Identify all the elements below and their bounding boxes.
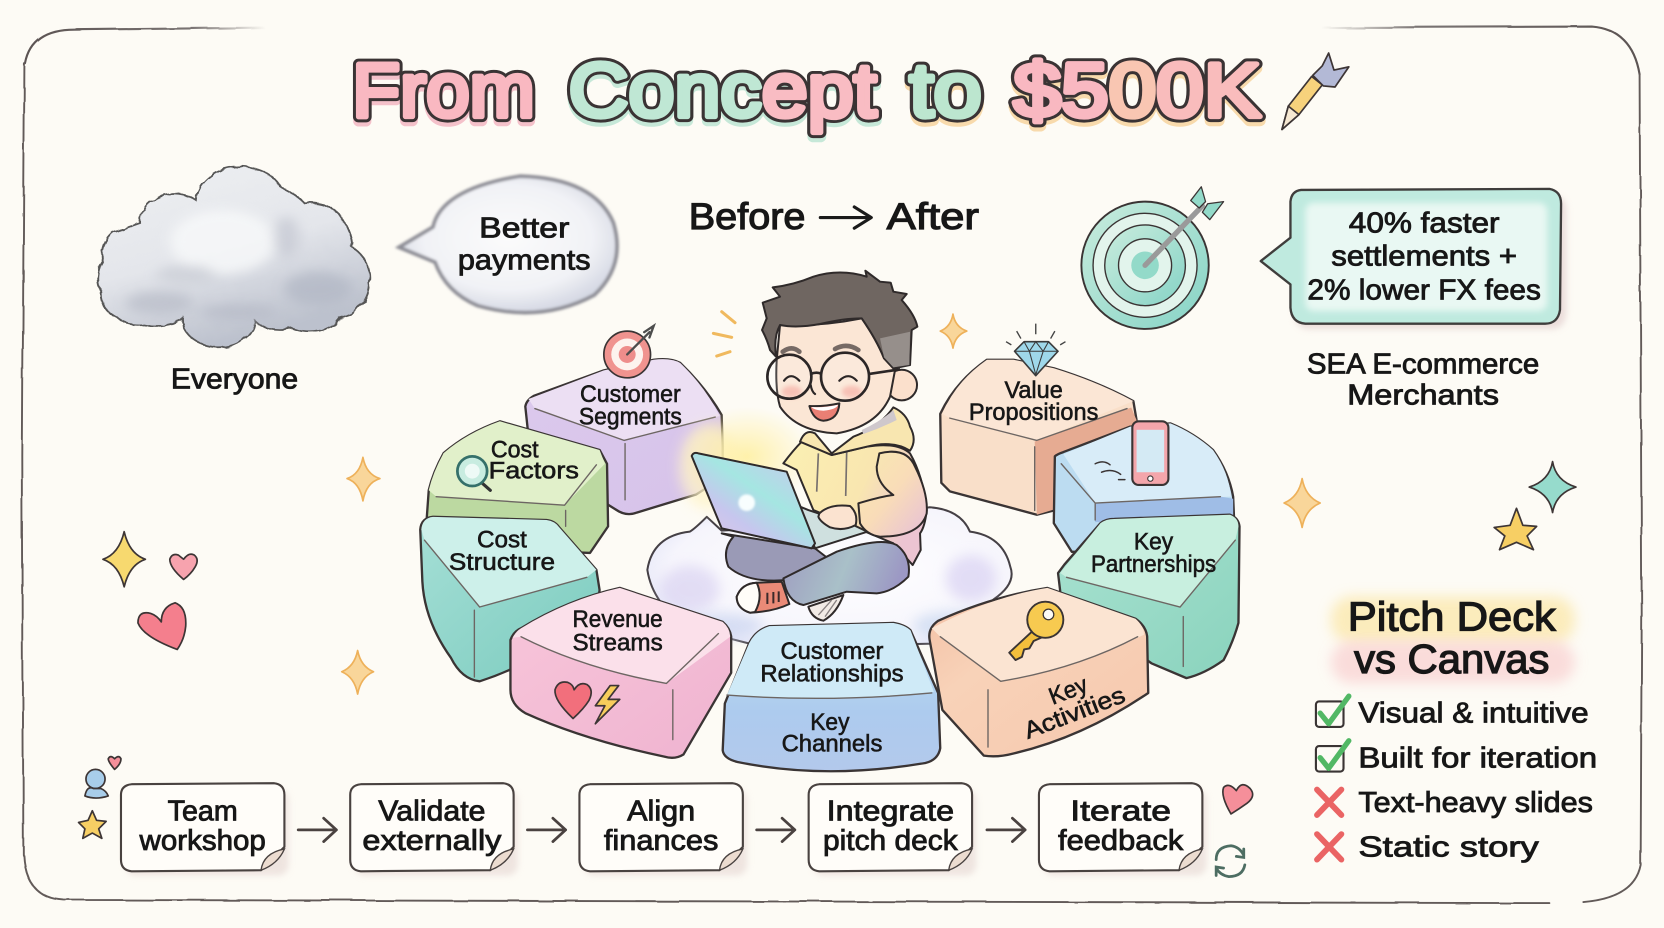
hair xyxy=(762,271,917,368)
process step: Align finances xyxy=(579,783,747,876)
icon: heart and lightning xyxy=(555,682,620,724)
title: Concept xyxy=(569,49,877,134)
character with laptop xyxy=(680,271,927,621)
process step: Align finances: finances xyxy=(604,825,718,857)
block: Key Partnerships: Partnerships xyxy=(1091,551,1216,578)
title: to xyxy=(909,53,982,138)
sleeve xyxy=(858,452,927,537)
heading: Pitch Deck vs Canvas: Pitch Deck xyxy=(1348,593,1557,639)
block: Customer Relationships / Key Channels: Customer xyxy=(781,638,884,665)
process step: Iterate feedback: feedback xyxy=(1058,825,1184,857)
title: $500K xyxy=(1013,53,1261,138)
process step: Iterate feedback: Iterate xyxy=(1070,795,1171,827)
front leg xyxy=(783,542,909,605)
title: $500K xyxy=(1013,49,1261,134)
block: Value Propositions: Propositions xyxy=(969,399,1098,426)
block: Customer Segments xyxy=(525,359,739,514)
label: Everyone: Everyone xyxy=(171,363,298,395)
heading: Before to After: Before xyxy=(689,195,805,237)
callout: 40% faster settlements xyxy=(1261,189,1566,329)
label: SEA E-commerce Merchants: SEA E-commerce xyxy=(1307,349,1539,381)
item: Visual & intuitive: Visual & intuitive xyxy=(1358,698,1589,730)
block: Customer Relationships / Key Channels xyxy=(723,623,940,771)
heading: Pitch Deck vs Canvas: vs Canvas xyxy=(1354,636,1549,682)
block: Cost Factors xyxy=(427,421,608,553)
back leg xyxy=(722,533,830,581)
decorative sparkles and hearts xyxy=(103,314,1576,814)
item: Static story: Static story xyxy=(1358,831,1540,863)
process step: Team workshop: workshop xyxy=(139,825,266,857)
process step: Integrate pitch deck xyxy=(809,783,976,876)
hoodie body xyxy=(783,442,927,565)
icon: key xyxy=(1009,602,1063,660)
block: Cost Factors: Cost xyxy=(491,436,539,463)
process step: Validate externally: Validate xyxy=(378,795,486,827)
block: Customer Segments: Segments xyxy=(579,403,682,430)
block: Revenue Streams: Streams xyxy=(573,630,663,657)
item: Static story xyxy=(1317,831,1540,863)
shoes xyxy=(737,582,843,621)
title: Concept xyxy=(569,53,877,138)
label: SEA E-commerce Merchants xyxy=(1307,349,1539,411)
callout: 40% faster settlements: 2% lower FX fees xyxy=(1307,274,1541,306)
icon: diamond xyxy=(1006,324,1065,376)
face xyxy=(776,318,895,433)
item: Built for iteration: Built for iteration xyxy=(1358,742,1597,774)
laptop screen xyxy=(692,453,815,548)
list: pros and cons xyxy=(1316,696,1597,863)
sparkle: orange right xyxy=(1284,479,1320,527)
sparkle: teal xyxy=(1529,462,1576,513)
process step: Align finances: Align xyxy=(627,795,695,827)
block: Key Activities xyxy=(929,588,1148,756)
block: Key Activities: Key xyxy=(1045,671,1091,711)
eyebrows xyxy=(783,346,858,352)
block: Cost Structure: Cost xyxy=(477,527,527,554)
sparkle: orange near head xyxy=(940,314,967,348)
speech bubble: Better payments: payments xyxy=(458,245,591,277)
arrow xyxy=(298,818,336,842)
process step: Team workshop xyxy=(121,783,289,876)
sparkle: large yellow xyxy=(103,532,145,587)
speech bubble: Better payments xyxy=(399,176,617,313)
process step: Iterate feedback xyxy=(1039,783,1207,876)
block: Revenue Streams: Revenue xyxy=(573,606,663,633)
heart: large left xyxy=(138,603,186,649)
ear xyxy=(886,370,917,400)
speech bubble: Better payments: Better xyxy=(479,213,570,245)
icon: refresh arrows xyxy=(1216,846,1245,877)
heading: Before to After: After xyxy=(887,195,979,237)
star: gold xyxy=(1494,508,1537,550)
title: From xyxy=(352,49,535,134)
heading: Pitch Deck vs Canvas xyxy=(1331,593,1575,683)
icon: phone xyxy=(1095,421,1168,485)
laptop base xyxy=(800,507,867,548)
block: Customer Relationships / Key Channels: Channels xyxy=(782,730,882,757)
title: to xyxy=(909,49,982,134)
heading: Before to After xyxy=(689,195,979,237)
block: phone blue xyxy=(1054,423,1234,552)
block: Cost Structure: Structure xyxy=(449,549,555,576)
title: to xyxy=(909,49,982,134)
block: Customer Segments: Customer xyxy=(580,381,681,408)
heart: right of process xyxy=(1223,785,1253,814)
callout: 40% faster settlements: settlements + xyxy=(1331,240,1517,272)
block: Key Partnerships: Key xyxy=(1134,529,1173,556)
callout: 40% faster settlements: 40% faster xyxy=(1349,207,1500,239)
icon: pencil dart xyxy=(1282,53,1349,129)
block: Cost Factors: Factors xyxy=(489,458,579,485)
arrow xyxy=(757,818,795,842)
icon: large target with dart xyxy=(1081,187,1224,329)
item: Text-heavy slides: Text-heavy slides xyxy=(1358,787,1593,819)
glow rays xyxy=(713,312,735,356)
title: Concept xyxy=(569,49,877,134)
heart: small left xyxy=(170,554,197,579)
block: Customer Relationships / Key Channels: Key xyxy=(810,709,850,736)
block: Customer Relationships / Key Channels: Relationships xyxy=(760,660,904,687)
block: Key Partnerships xyxy=(1058,515,1240,678)
hand xyxy=(818,505,856,529)
block: Key Activities: Activities xyxy=(1020,682,1129,745)
process step: Integrate pitch deck: Integrate xyxy=(827,795,954,827)
block: Value Propositions xyxy=(940,360,1137,515)
process step: Validate externally xyxy=(350,783,518,876)
arrow xyxy=(527,818,566,842)
icon: team person with heart and star xyxy=(79,757,121,838)
title xyxy=(352,49,1261,138)
block: Cost Structure xyxy=(420,517,600,681)
sparkle: orange left upper xyxy=(347,457,380,501)
arrow xyxy=(987,818,1025,842)
block: Revenue Streams xyxy=(510,588,731,758)
process step: Integrate pitch deck: pitch deck xyxy=(823,825,958,857)
block: Value Propositions: Value xyxy=(1004,377,1063,404)
cushion cloud xyxy=(647,507,1012,647)
title: From xyxy=(352,53,535,138)
label: SEA E-commerce Merchants: Merchants xyxy=(1347,379,1499,411)
sparkle: orange left lower xyxy=(342,651,374,694)
process step: Team workshop: Team xyxy=(168,795,238,827)
glasses xyxy=(767,353,900,401)
icon: small red target xyxy=(604,326,654,378)
title: $500K xyxy=(1013,49,1261,134)
drawstrings xyxy=(817,452,847,496)
cloud: vague audience xyxy=(98,167,370,347)
title: From xyxy=(352,49,535,134)
hood xyxy=(800,407,914,455)
process step: Validate externally: externally xyxy=(362,825,502,857)
eyes and mouth xyxy=(784,376,857,394)
icon: magnifier xyxy=(457,456,490,490)
